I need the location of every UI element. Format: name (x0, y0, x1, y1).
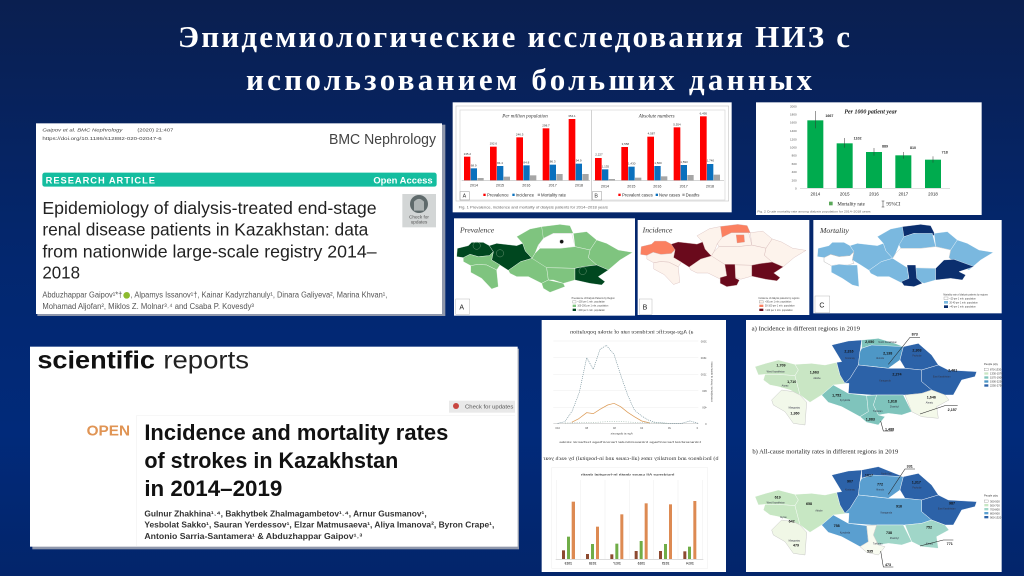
map: incidence in regions 2019: Pavlodar (912, 355, 922, 358)
chart: per million population: 84.8 (523, 160, 530, 164)
legend: 500-700 (990, 503, 1000, 507)
map: all-cause mortality in regions 2019: Pavlodar (912, 486, 922, 489)
chart: incidence and mortality by year bars: 2018 (589, 561, 596, 565)
callout lines (881, 469, 953, 567)
panel: prevalence map: Prevalence (459, 225, 495, 234)
map: incidence in regions 2019: 2,050 (865, 340, 874, 344)
map: incidence in regions 2019: Mangystau (789, 406, 801, 409)
map: incidence in regions 2019: 1,646 (927, 395, 936, 399)
chart: absolute numbers: 2018 (706, 184, 714, 188)
article title: Epidemiology of dialysis-treated end-stage (42, 198, 377, 218)
map: all-cause mortality in regions 2019: Aktobe (815, 510, 823, 513)
authors: Abduzhappar Gaipov¹*† (42, 290, 122, 299)
panel: crude mortality bar chart (Fig. 2): 718 (942, 151, 948, 155)
map: incidence regions (641, 224, 806, 287)
chart: absolute numbers: 2,227 (595, 153, 603, 157)
map: all-cause mortality in regions 2019: Karaganda (881, 511, 893, 514)
research article band: RESEARCH ARTICLE (46, 175, 155, 185)
chart: per million population: 68.9 (471, 163, 477, 167)
chart: age-specific incidence line chart: 0 (705, 422, 707, 426)
callout lines (881, 337, 958, 431)
map: incidence in regions 2019: 1,883 (866, 417, 875, 421)
map: incidence in regions 2019: 2,461 (948, 369, 957, 373)
map: incidence in regions 2019: 1,709 (776, 364, 786, 368)
chart: per million population (460, 114, 590, 200)
panel: regional maps 2019 (746, 320, 1003, 572)
chart: absolute numbers: 4,587 (648, 132, 655, 136)
chart: absolute numbers: 2017 (680, 184, 688, 188)
map: incidence in regions 2019: 873 (912, 333, 918, 337)
map: all-cause mortality in regions 2019: 907 (847, 479, 853, 483)
chart: age-specific incidence line chart: 400 (702, 406, 707, 410)
chart: per million population: 135.2 (464, 152, 471, 156)
panel: crude mortality bar chart (Fig. 2): Per 1000 patient year (844, 109, 898, 115)
article title (42, 198, 377, 282)
map: incidence in regions 2019: 2,157 (948, 408, 957, 412)
panel: crude mortality bar chart (Fig. 2): 810 (910, 146, 916, 150)
panel: crude mortality bar chart (Fig. 2) (756, 102, 982, 215)
legend (984, 493, 1002, 519)
map: all-cause mortality in regions 2019: Akmola (876, 488, 885, 491)
panel: crude mortality bar chart (Fig. 2): 2000 (790, 104, 797, 108)
map: prevalence regions (457, 224, 633, 292)
chart: absolute numbers: 2016 (653, 184, 661, 188)
chart: incidence and mortality by year bars: Incidence All cause death In-hospital death (581, 473, 674, 477)
legend: incidence: <50 per 1 mln. population (765, 301, 792, 304)
panel: crude mortality bar chart (Fig. 2): Mortality rate (837, 203, 866, 208)
chart: per million population: 94.9 (576, 159, 582, 163)
panel: crude mortality bar chart (Fig. 2): 2017 (899, 191, 909, 196)
chart: absolute numbers: New cases (659, 193, 680, 198)
map: all-cause mortality in regions 2019: Almaty (926, 542, 934, 545)
chart: per million population: 86.3 (550, 160, 556, 164)
map: incidence in regions 2019: Almaty (926, 402, 934, 405)
legend: incidence: >100 per 1 mln. population (765, 309, 793, 312)
map: incidence in regions 2019: Kostanay (845, 357, 856, 360)
check for updates button (449, 401, 515, 413)
panel: BMC Nephrology article header: (2020) 21:407 (137, 128, 174, 133)
panel: crude mortality bar chart (Fig. 2): 1102 (854, 136, 862, 140)
map: all-cause mortality in regions 2019: 771 (947, 542, 953, 546)
legend (984, 362, 1003, 388)
map: all-cause mortality in regions 2019: 1017 (865, 473, 873, 477)
map: incidence in regions 2019: 1,488 (885, 427, 894, 431)
chart: per million population: Incidence (516, 193, 535, 198)
chart: per million population: Prevalence (487, 193, 509, 198)
map: incidence in regions 2019: 1,752 (832, 394, 841, 398)
map: all-cause mortality in regions 2019: 658 (806, 502, 812, 506)
panel: crude mortality bar chart (Fig. 2): 95%CI (886, 203, 901, 208)
panel: incidence map: B (643, 305, 648, 312)
map: incidence in regions 2019: Akmola (876, 357, 885, 360)
chart: absolute numbers: 5,554 (673, 122, 681, 126)
map: all-cause mortality in regions 2019: Atyrau (780, 516, 787, 519)
map: incidence in regions 2019: 1,818 (888, 399, 897, 403)
map: incidence in regions 2019: Atyrau (782, 385, 789, 388)
map: all-cause mortality in regions 2019: 479 (793, 544, 799, 548)
legend: 1570-1900 (990, 376, 1003, 380)
legend: mortality: >40 per 1 mln. population (949, 306, 976, 309)
panel: crude mortality bar chart (Fig. 2): 1600 (790, 121, 797, 125)
panel: incidence map: Incidence (642, 225, 673, 234)
title: Эпидемиологические исследования НИЗ с (178, 19, 850, 54)
legend: 1330-1570 (990, 372, 1003, 376)
legend: mortality: Mortality rate of dialysis patients by regions (943, 293, 989, 296)
chart: absolute numbers: 1,560 (654, 161, 662, 165)
chart: incidence and mortality by year bars: 2016 (637, 561, 645, 565)
legend: mortality: <20 per 1 mln. population (949, 297, 976, 300)
authors (42, 290, 387, 311)
panel: mortality map: C (819, 302, 824, 309)
legend: 870-1330 (990, 368, 1002, 372)
panel: crude mortality bar chart (Fig. 2): 1400 (790, 129, 797, 133)
chart: incidence and mortality by year bars: 2015 (662, 561, 669, 565)
legend: People p/py (984, 362, 999, 366)
map: all-cause mortality in regions 2019: East Kazakhstan (938, 507, 956, 510)
chart: absolute numbers: 1,430 (628, 162, 636, 166)
map: all-cause mortality in regions 2019 (752, 448, 1002, 567)
panel: crude mortality bar chart (Fig. 2): 1667 (825, 114, 833, 118)
legend: incidence: Incidence of dialysis patients by regions (758, 297, 800, 300)
map: incidence in regions 2019: Kyzylorda (840, 399, 851, 402)
map: incidence in regions 2019: Turkistan (873, 410, 883, 413)
panel: BMC Nephrology article header: https://doi.org/10.1186/s12882-020-02047-6 (42, 136, 162, 141)
panel: BMC Nephrology article header (36, 123, 445, 316)
map: incidence in regions 2019: 1,710 (787, 380, 796, 384)
chart: absolute numbers: 2014 (601, 184, 609, 188)
authors (144, 509, 494, 541)
chart: per million population: 354.1 (568, 114, 576, 118)
panel: crude mortality bar chart (Fig. 2): 2015 (840, 191, 850, 196)
chart: per million population: 2016 (522, 184, 530, 188)
legend: 1900-2250 (990, 380, 1003, 384)
legend: prevalence: >200 per 1 mln. population (577, 309, 606, 312)
map: incidence in regions 2019: 2,274 (892, 372, 903, 376)
map: incidence in regions 2019 (752, 326, 1003, 431)
map: all-cause mortality in regions 2019: 535 (867, 550, 873, 554)
chart: absolute numbers: 6,495 (700, 111, 707, 115)
map: all-cause mortality in regions 2019: Zhambyl (890, 538, 899, 540)
legend: 800-900 (990, 511, 1000, 515)
chart: age-specific incidence line chart: 2000 (700, 339, 707, 343)
chart: age-specific incidence line chart: a) Age-specific incidence rate of stroke population (570, 328, 693, 335)
panel: Scientific Reports article header: OPEN (87, 422, 130, 439)
map: all-cause mortality in regions 2019: 619 (775, 495, 781, 499)
panel: dialysis bar charts (Fig. 1) (453, 102, 732, 212)
legend: incidence (758, 297, 800, 312)
panel: crude mortality bar chart (Fig. 2): 2014 (811, 191, 821, 196)
legend: prevalence (572, 297, 615, 312)
chart: absolute numbers: Prevalent cases (622, 193, 653, 198)
panel: crude mortality bar chart (Fig. 2): 1000 (790, 145, 797, 149)
chart: absolute numbers (592, 111, 724, 200)
chart: incidence and mortality by year bars: 2017 (613, 561, 621, 565)
legend: incidence: 50-100 per 1 mln. population (765, 305, 795, 308)
chart: per million population: 84.4 (497, 161, 503, 165)
map: incidence in regions 2019: North Kazakhstan (878, 341, 898, 344)
chart: age-specific incidence line chart: 1600 (700, 356, 707, 360)
map: all-cause mortality in regions 2019: 642 (789, 519, 795, 523)
chart: incidence and mortality by year bars: 2019 (564, 561, 572, 565)
chart: absolute numbers: Deaths (686, 193, 699, 198)
chart: per million population: 2018 (575, 184, 583, 188)
authors: Antonio Sarria-Santamera¹ & Abduzhappar Gaipov¹˒³ (144, 531, 363, 541)
chart: per million population: A (463, 193, 467, 199)
panel: prevalence map: A (459, 305, 464, 312)
chart: per million population: 298.7 (542, 123, 550, 127)
chart: incidence and mortality by year bars: 2014 (686, 561, 694, 565)
chart: per million population: 192.6 (490, 142, 497, 146)
legend: 900-1320 (990, 515, 1002, 519)
authors: Yesbolat Sakko¹, Sauran Yerdessov¹, Elzar Matmusaeva¹, Aliya Imanova², Byron Crape¹, (144, 520, 494, 530)
chart: per million population: Mortality rate (541, 193, 567, 198)
chart: per million population: 2014 (470, 184, 478, 188)
chart: incidence and mortality by year bars: b) Incidence and mortality rates (all-cause and in-hospital) by each year (543, 455, 718, 462)
chart: age-specific incidence line chart: Age at diagnosis (610, 431, 633, 435)
legend: mortality (943, 293, 989, 309)
map: all-cause mortality in regions 2019: 758 (834, 524, 840, 528)
chart: age-specific incidence line chart: 80 (585, 426, 588, 430)
map: incidence in regions 2019: a) Incidence in different regions in 2019 (752, 326, 860, 333)
panel: Scientific Reports article header: reports (163, 346, 249, 374)
panel: crude mortality bar chart (Fig. 2): 800 (792, 154, 797, 158)
legend: 2250-2750 (990, 384, 1003, 388)
legend: People p/py (984, 493, 999, 497)
panel: crude mortality bar chart (Fig. 2): 889 (882, 145, 888, 149)
chart: age-specific incidence line chart: 0 (696, 426, 698, 430)
panel: crude mortality bar chart (Fig. 2): 2016 (869, 191, 879, 196)
map: all-cause mortality in regions 2019: 473 (885, 563, 891, 567)
panel: incidence map (638, 220, 809, 315)
panel: crude mortality bar chart (Fig. 2): 600 (792, 162, 797, 166)
legend: 700-800 (990, 507, 1000, 511)
panel: mortality map: Mortality (819, 226, 850, 235)
panel: mirrored stroke charts (542, 320, 726, 572)
map: all-cause mortality in regions 2019: Kostanay (845, 489, 856, 492)
map: all-cause mortality in regions 2019: 1,317 (912, 480, 921, 484)
chart: per million population: Per million population (501, 115, 548, 120)
map: incidence in regions 2019: 2,138 (883, 351, 892, 355)
map: all-cause mortality in regions 2019: Kyzylorda (840, 531, 851, 534)
chart: absolute numbers: 1,135 (602, 164, 609, 168)
panel: BMC Nephrology article header: Gaipov et al. BMC Nephrology (42, 128, 123, 133)
map: incidence in regions 2019: West Kazakhstan (767, 370, 785, 373)
map: incidence in regions 2019: Aktobe (813, 377, 821, 380)
article title: renal disease patients in Kazakhstan: data (42, 220, 368, 240)
legend: prevalence: Prevalence of Dialysis Patients by Region (572, 297, 615, 300)
map: incidence in regions 2019: Karaganda (879, 380, 891, 383)
chart: absolute numbers: 3,558 (622, 142, 629, 146)
map: all-cause mortality in regions 2019: 738 (886, 531, 892, 535)
chart: age-specific incidence line chart: 800 (702, 389, 707, 393)
authors: Mohamad Aljofan², Miklos Z. Molnar³˒⁴ and Csaba P. Kovesdy³ (42, 302, 254, 311)
map: all-cause mortality in regions 2019: Mangystau (789, 539, 801, 542)
article title: 2018 (42, 262, 80, 282)
panel: crude mortality bar chart (Fig. 2): 1200 (790, 137, 797, 141)
chart: age-specific incidence line chart: cases/person-years of observation (710, 361, 714, 402)
chart: absolute numbers: 2015 (627, 184, 635, 188)
panel: crude mortality bar chart (Fig. 2): 0 (795, 187, 797, 191)
title (178, 19, 850, 97)
panel: BMC Nephrology article header: BMC Nephrology (329, 132, 437, 148)
chart: absolute numbers: 1,740 (707, 158, 714, 162)
article title: Incidence and mortality rates (144, 420, 448, 445)
panel: mortality map (813, 220, 1002, 313)
chart: age-specific incidence line chart: 20 (667, 426, 671, 430)
authors: , Alpamys Issanov¹†, Kainar Kadyrzhanuly¹, Dinara Galiyeva², Marina Khvan¹, (131, 290, 387, 299)
map: all-cause mortality in regions 2019: 772 (877, 482, 883, 486)
chart: incidence and mortality by year bars (543, 455, 718, 568)
panel: Scientific Reports article header: scientific (37, 346, 155, 374)
chart: age-specific incidence line chart: 1200 (700, 373, 707, 377)
map: mortality regions (817, 224, 993, 287)
legend: prevalence: 100-200 per 1 mln. population (577, 305, 609, 308)
article title: in 2014–2019 (144, 476, 282, 501)
icon: check for updates: Check for (409, 215, 429, 220)
panel: crude mortality bar chart (Fig. 2): 1800 (790, 113, 797, 117)
panel: crude mortality bar chart (Fig. 2): Fig. 2 Crude mortality rate among dialysis population for 2014–2018 years (757, 210, 871, 214)
article title (144, 420, 448, 501)
article title: of strokes in Kazakhstan (144, 448, 398, 473)
check for updates button: Check for updates (465, 404, 514, 410)
chart: mortality bars (807, 120, 941, 188)
chart: age-specific incidence line chart: Intracerebral hemorrhage Intraventricular hemorrhage Ischemic stroke (559, 440, 701, 444)
map: all-cause mortality in regions 2019: West Kazakhstan (767, 501, 785, 504)
panel: crude mortality bar chart (Fig. 2): 200 (792, 178, 797, 182)
map: incidence in regions 2019: 1,360 (790, 412, 800, 416)
map: all-cause mortality in regions 2019: b) All-cause mortality rates in different regions in 2019 (752, 448, 898, 455)
map: all-cause mortality in regions 2019: 331 (907, 465, 913, 469)
chart: age-specific incidence line chart: 100 (555, 426, 560, 430)
icon: check for updates (402, 194, 436, 227)
map: all-cause mortality in regions 2019: Turkistan (873, 542, 883, 545)
chart: per million population: 2015 (496, 184, 504, 188)
panel: dialysis bar charts (Fig. 1): Fig. 1 Prevalence, incidence and mortality of dialysis patients for 2014–2018 years (459, 205, 608, 209)
legend: prevalence: <100 per 1 mln. population (577, 301, 606, 304)
title: использованием больших данных (246, 62, 812, 97)
panel: Scientific Reports article header (30, 346, 519, 549)
authors: Gulnur Zhakhina¹˒⁴, Bakhytbek Zhalmagambetov¹˒⁴, Arnur Gusmanov¹, (144, 509, 427, 519)
icon: check for updates: updates (411, 220, 428, 225)
research article band: Open Access (373, 175, 433, 185)
panel: prevalence map (454, 218, 635, 316)
map: incidence in regions 2019: 2,303 (912, 349, 922, 353)
map: all-cause mortality in regions 2019: 987 (949, 501, 955, 505)
map: all-cause mortality in regions 2019: North Kaz. (881, 472, 893, 475)
chart: per million population: 246.5 (516, 132, 524, 136)
chart: absolute numbers: 1,593 (680, 160, 688, 164)
map: incidence in regions 2019: 2,316 (844, 349, 854, 353)
map: incidence in regions 2019: 1,663 (810, 371, 819, 375)
chart: per million population: 2017 (549, 184, 557, 188)
article title: from nationwide large-scale registry 2014– (42, 241, 377, 261)
legend: 300-500 (990, 499, 1000, 503)
research article band (42, 173, 437, 187)
chart: age-specific incidence line chart: 60 (612, 426, 616, 430)
chart: age-specific incidence line chart (553, 328, 714, 444)
map: incidence in regions 2019: Zhambyl (890, 407, 899, 409)
map: all-cause mortality in regions 2019: 752 (926, 526, 932, 530)
map: incidence in regions 2019: East Kazakhstan (933, 375, 951, 378)
legend: mortality: 20-40 per 1 mln. population (949, 301, 978, 304)
panel: crude mortality bar chart (Fig. 2): 400 (792, 170, 797, 174)
chart: absolute numbers: B (594, 193, 598, 199)
panel: crude mortality bar chart (Fig. 2): 2018 (928, 191, 938, 196)
map: all-cause mortality in regions 2019: 916 (896, 505, 902, 509)
chart: absolute numbers: Absolute numbers (638, 115, 675, 120)
chart: age-specific incidence line chart: 40 (640, 426, 643, 430)
